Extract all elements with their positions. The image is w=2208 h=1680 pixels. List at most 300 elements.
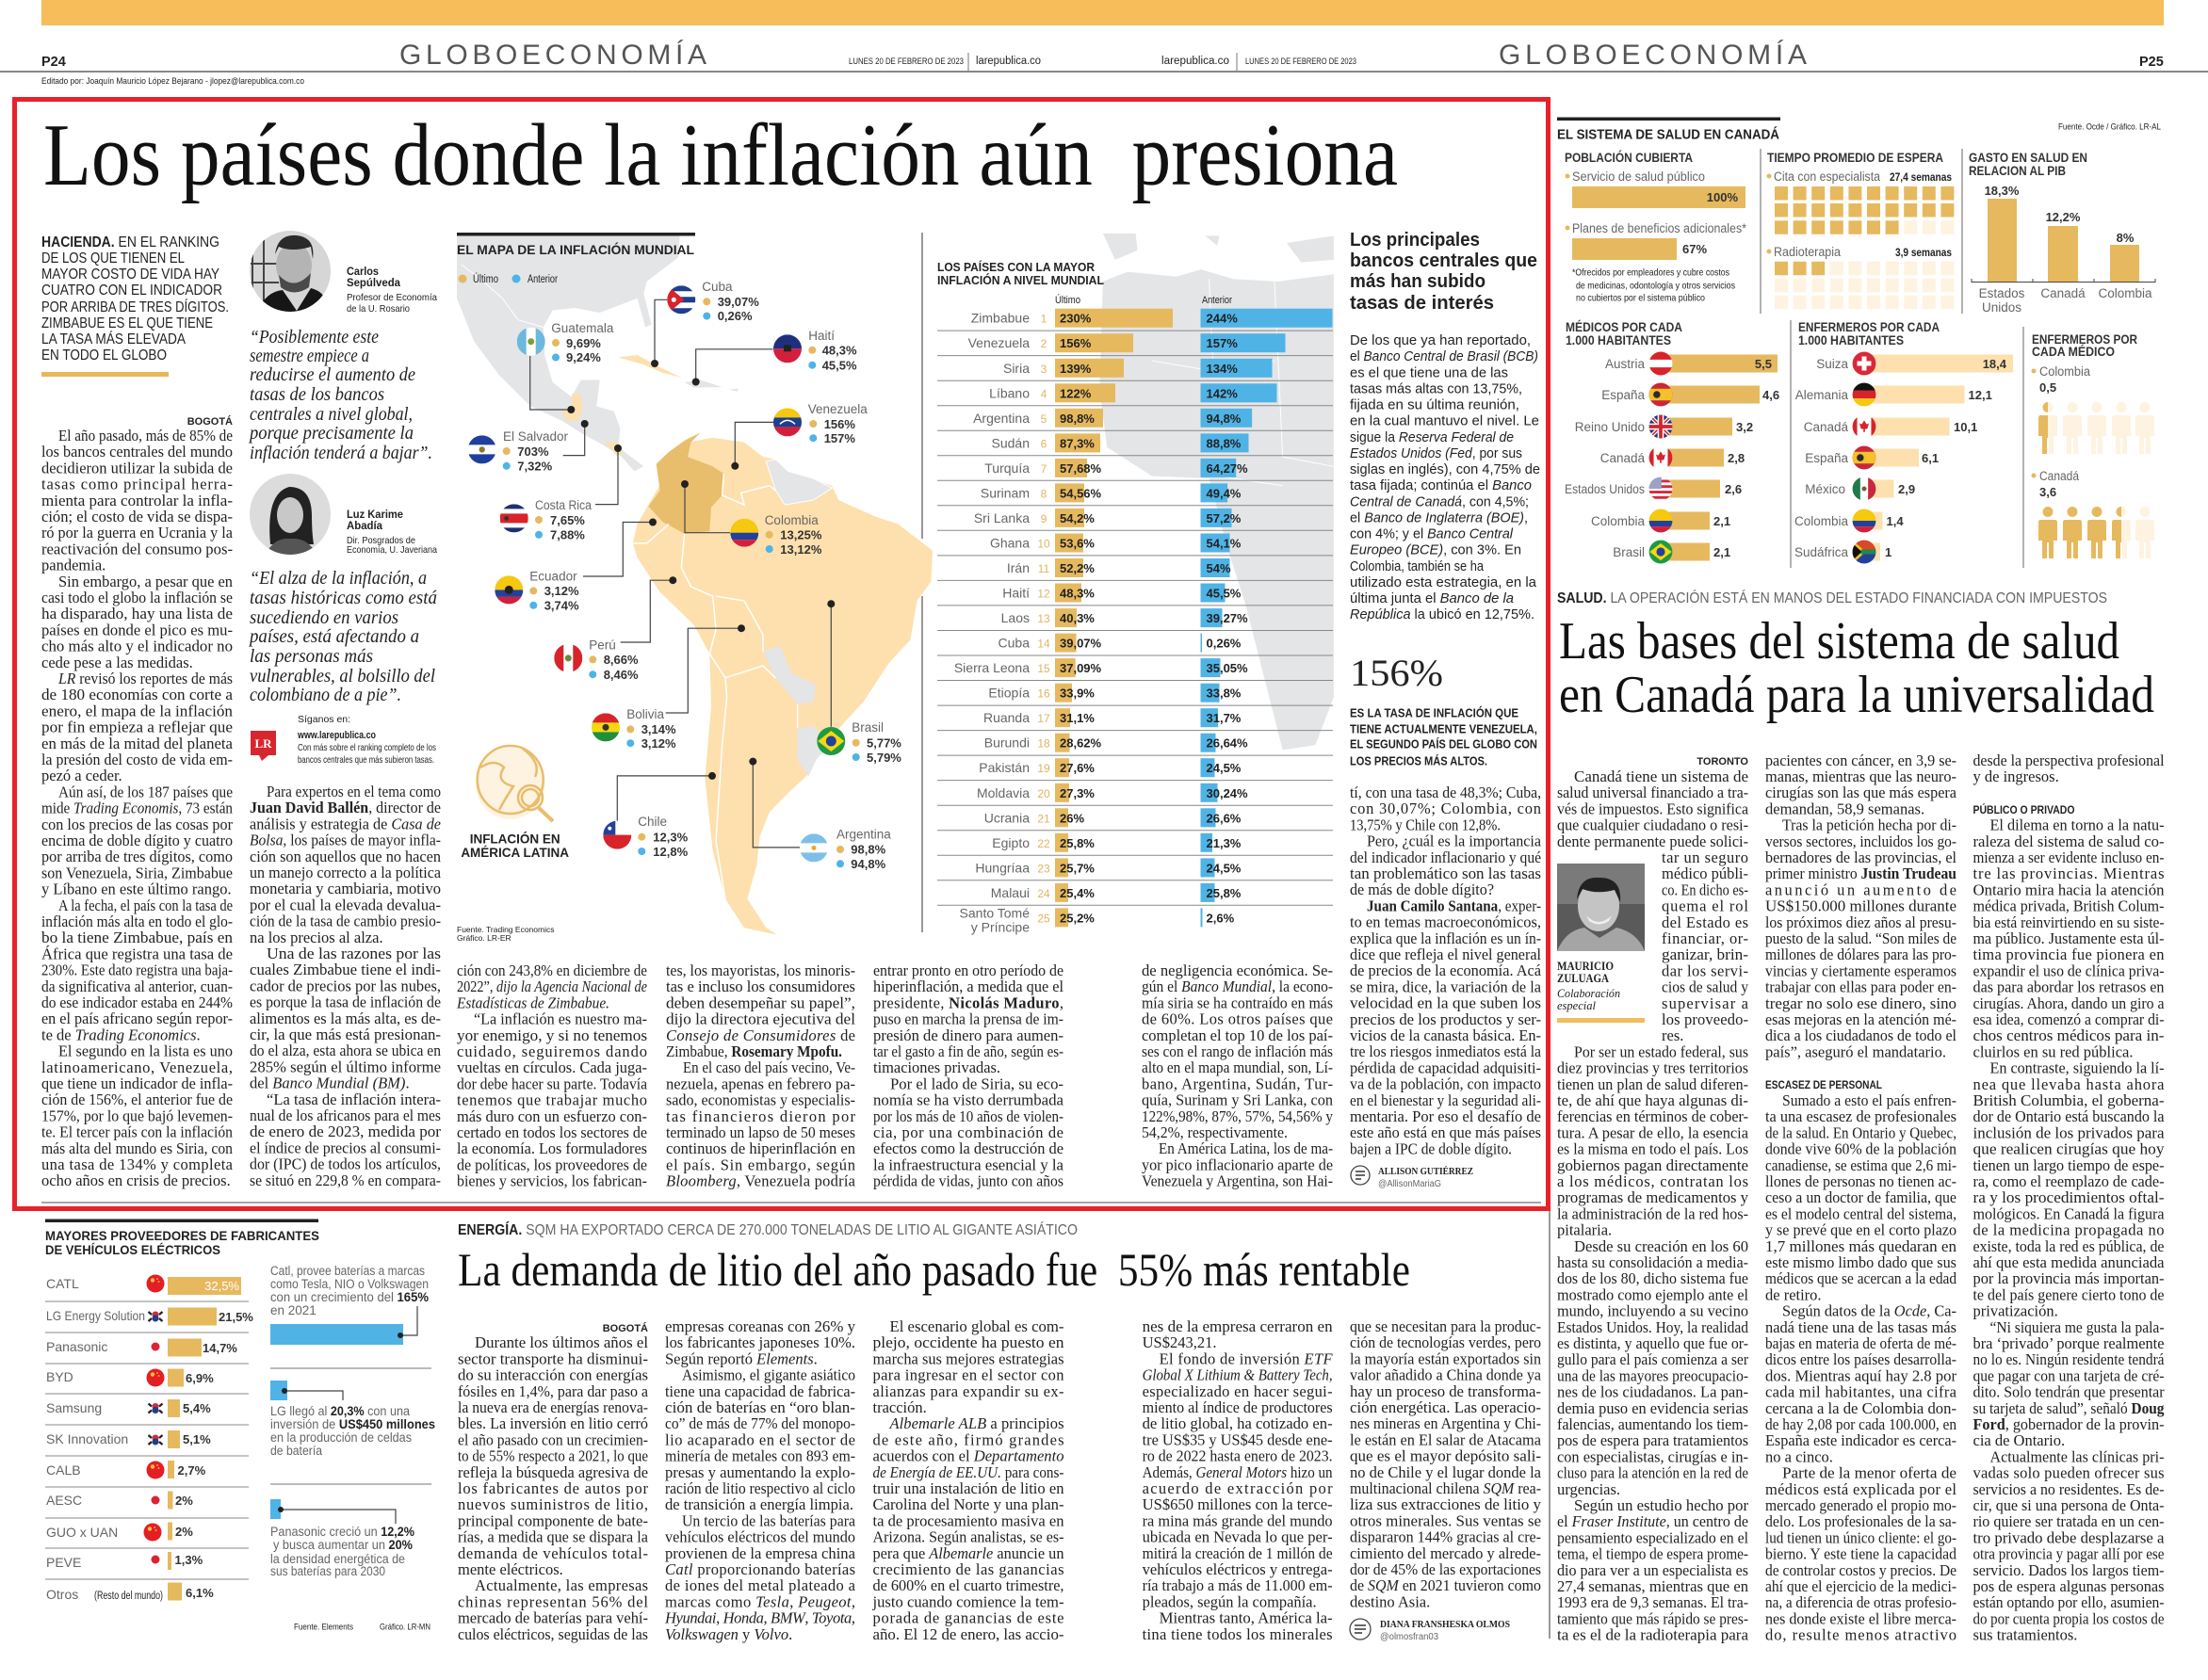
row: Sierra Leona: 37,09% [1060, 661, 1102, 675]
map callout: Guatemala [517, 321, 614, 413]
sidebar body: central banks: tasa fijada; continúa el Banco [1350, 478, 1532, 493]
article column 7 [1350, 783, 1542, 1157]
health article column 2: cercana a la de Colombia don- [1765, 1399, 1956, 1417]
pull quote 2: tasas históricas como está [250, 588, 437, 608]
health article column 1: dar los servi- [1662, 961, 1748, 979]
row: Ghana [937, 533, 1333, 556]
article column 2: alimentos es la más alta, es de- [250, 1010, 441, 1027]
lithium article column 3: truir una instalación de litio en [872, 1479, 1064, 1497]
map callout: Ecuador: 3,12% [544, 584, 579, 598]
health article column 2: donde vive 60% de la población [1765, 1140, 1956, 1158]
pull quote 1: centrales a nivel global, [250, 404, 413, 425]
sidebar body: central banks: tasas más altas con 13,75%, [1350, 381, 1522, 396]
article column 7: va de la población, con impacto [1350, 1075, 1541, 1093]
health story kicker: SALUD. LA OPERACIÓN ESTÁ EN MANOS DEL ESTADO FINANCIADA CON IMPUESTOS [1557, 590, 2107, 606]
health article column 3: expandir el uso de clínica priva- [1973, 961, 2165, 979]
health article column 3: no lo es. Ningún residente tendrá [1973, 1350, 2165, 1368]
article column 1: Aún así, de los 187 países que [58, 783, 233, 800]
chart: population covered: 67% [1682, 242, 1707, 256]
map callout: Cuba [651, 280, 759, 367]
health article column 1: médico públi- [1662, 864, 1748, 882]
row: Cuba [937, 634, 1333, 655]
map callout: Bolivia: 3,14% [641, 722, 676, 736]
byline: Allison Gutiérrez [1351, 1166, 1473, 1189]
article column 3: la economía. Los formuladores [457, 1139, 647, 1157]
row: Argentina: 5 [1041, 412, 1047, 426]
sidebar body: central banks: el Banco de Inglaterra (BOE), [1350, 510, 1528, 525]
byline: Allison Gutiérrez: @AllisonMariaG [1378, 1179, 1441, 1189]
health article column 3: médica privada, British Colum- [1973, 897, 2165, 915]
row: Laos: 39,27% [1206, 611, 1248, 625]
row: Líbano [937, 383, 1333, 406]
article column 1: da significativa al anterior, cuan- [41, 977, 233, 995]
health article column 2: manas, mientras que las neuro- [1765, 767, 1956, 785]
chart: nurses per 1,000 inhabitants: 10,1 [1954, 420, 1977, 434]
article column 6: quía, Surinam y Sri Lanka, con [1142, 1091, 1333, 1109]
table column headers [1055, 294, 1232, 306]
health article column 3: desde la perspectiva profesional [1973, 751, 2165, 769]
chart: nurses per doctor: 3,6 [2039, 485, 2056, 499]
health article column 3: bia está reinvirtiendo en su siste- [1973, 913, 2165, 931]
web promo: www.larepublica.co [297, 730, 376, 741]
article column 3: Estadísticas de Zimbabue. [456, 993, 609, 1011]
lithium article column 4: nes de la empresa cerraron en [1143, 1317, 1333, 1335]
health article column 1: una de las mayores preocupacio- [1557, 1366, 1748, 1384]
row: Zimbabue: 230% [1060, 312, 1092, 326]
row: Ucrania: 26,6% [1206, 811, 1242, 825]
article column 1: que tiene un indicador de infla- [41, 1074, 233, 1092]
chart: nurses per 1,000 inhabitants: Suiza [1816, 357, 1848, 371]
row: Panasonic [46, 1339, 237, 1356]
lithium article column 1: los fabricantes de autos por [458, 1479, 648, 1497]
chart: nurses per 1,000 inhabitants: Sudáfrica [1794, 545, 1848, 559]
row: Venezuela [937, 333, 1333, 356]
page header: left: larepublica.co [976, 56, 1041, 67]
article column 5: pérdida de vidas, junto con años [873, 1172, 1063, 1190]
chart: population covered: *Ofrecidos por empleadores y cubre costos [1572, 267, 1729, 279]
row: Santo Tomé y Príncipe: 2,6% [1206, 911, 1235, 925]
callout: Catl: en 2021 [270, 1303, 317, 1317]
article column 1: enero, el mapa de la inflación [41, 702, 233, 719]
lithium article column 5: ción de tecnologías verdes, pero [1350, 1333, 1541, 1351]
health article column 3: nea que llevaba hasta ahora [1973, 1075, 2165, 1093]
health article column 2: na, a diferencia de otras profesio- [1765, 1593, 1956, 1611]
lithium article column 2: Catl proporcionando baterías [665, 1560, 855, 1578]
sidebar body: central banks: utilizado esta estrategia, en la [1350, 575, 1537, 590]
chart: average wait time: 3,9 semanas [1895, 246, 1952, 259]
health article column 1: salud universal financiado a tra- [1557, 783, 1748, 801]
article column 7: bajen a IPC de doble dígito. [1350, 1139, 1512, 1157]
article column 1: pandemia. [41, 557, 106, 574]
chart: health spending as share of GDP: 18,3% [1985, 184, 2020, 198]
lithium article column 3: ta de procesamiento masiva en [872, 1511, 1064, 1529]
article column 7: to en temas macroeconómicos, [1350, 913, 1541, 931]
article column 3: certado en todos los sectores de [457, 1123, 647, 1141]
lithium article column 5: ción energética. Las operacio- [1350, 1398, 1541, 1416]
health article column 3: Ontario mira hacia la atención [1973, 880, 2164, 898]
article column 3: de políticas, los proveedores de [457, 1155, 647, 1173]
health article column 1: demia puso en evidencia serias [1557, 1399, 1748, 1417]
health article column 3: ma público. Justamente esta úl- [1973, 929, 2165, 947]
map callout: Venezuela [731, 402, 868, 470]
sidebar body: central banks: Colombia, también se ha [1350, 559, 1485, 574]
lithium article column 2: Volkswagen y Volvo. [665, 1625, 792, 1643]
row: Zimbabue: 244% [1206, 312, 1238, 326]
chart: nurses per 1,000 inhabitants: ENFERMEROS POR CADA [1798, 320, 1940, 334]
health article column 2: país”, aseguró el mandatario. [1765, 1042, 1946, 1060]
chart: health spending as share of GDP: Colombia [2098, 286, 2152, 300]
lithium article column 2: ción de baterías en “oro blan- [665, 1398, 855, 1416]
health article column 2: delo. Los profesionales de la sa- [1765, 1512, 1956, 1530]
big number caption: EL SEGUNDO PAÍS DEL GLOBO CON [1350, 736, 1537, 751]
pull quote 2 [248, 568, 437, 705]
row: Etiopía [937, 684, 1333, 705]
lithium article column 5 [1350, 1317, 1542, 1610]
health article column 3: servicios a no residentes. Es de- [1973, 1480, 2165, 1498]
lithium article column 2: de iones del metal plateado a [665, 1576, 856, 1594]
article column 5: Por el lado de Siria, su eco- [890, 1074, 1063, 1092]
lithium article column 3: plejo, occidente ha puesto en [872, 1333, 1063, 1351]
row: AESC: AESC [46, 1493, 82, 1508]
map callout: Chile: 12,3% [653, 831, 689, 844]
lithium article column 1: chinas representan 56% del [458, 1592, 648, 1610]
chart: nurses per doctor [2031, 332, 2154, 558]
health article column 3: dor de Ontario está buscando la [1973, 1107, 2165, 1125]
article column 1: te. El tercer país con la inflación [41, 1123, 233, 1141]
chart: doctors per 1,000 inhabitants: 2,6 [1725, 482, 1742, 496]
row: Sierra Leona: Sierra Leona [954, 660, 1030, 675]
health article column 2: 1,7 millones más quedaran en [1765, 1237, 1956, 1255]
row: Irán [937, 558, 1333, 580]
health article column 1: del Estado es [1662, 913, 1748, 931]
row: Egipto: 25,8% [1060, 836, 1095, 850]
lithium article column 5: dor de 45% de las exportaciones [1350, 1560, 1541, 1578]
lithium article column 4: mitirá la creación de 1 millón de [1143, 1544, 1333, 1562]
panel source: Gráfico. LR-MN [380, 1622, 430, 1633]
callout: Panasonic: la densidad energética de [270, 1552, 405, 1566]
health article column 2: los próximos diez años al presu- [1765, 913, 1956, 931]
row: Cuba: 0,26% [1206, 637, 1242, 651]
article column 1: tasas como principal herra- [41, 476, 233, 493]
lithium article column 4: de litio global, ha cotizado en- [1143, 1414, 1333, 1432]
health article column 3: pos de espera algunas personas [1973, 1577, 2165, 1595]
article column 5: nomía se ha visto derrumbada [873, 1091, 1064, 1109]
expert: Luz Karime Abadía: Dir. Posgrados de [347, 535, 415, 546]
lithium article column 2: presas y aumentando la explo- [665, 1463, 855, 1481]
article column 1: inflación más alta en todo el glo- [41, 913, 233, 930]
lithium article column 2 [664, 1317, 856, 1643]
health article column 2 [1765, 751, 1957, 1644]
page header: right: GLOBOECONOMÍA [1499, 40, 1807, 71]
chart: health spending as share of GDP: RELACION AL PIB [1969, 164, 2066, 178]
article column 3: 2022”, dijo la Agencia Nacional de [457, 977, 647, 995]
map callout: Colombia: 13,25% [780, 527, 822, 542]
article column 2: cir, la que más está presionan- [250, 1026, 441, 1043]
map callout: Chile [603, 772, 716, 859]
article column 6: ses con el rango de inflación más [1142, 1042, 1333, 1060]
article column 7: del indicador inflacionario y qué [1350, 848, 1541, 866]
article column 7: 13,75% y Chile con 12,8%. [1350, 816, 1501, 833]
chart: health spending as share of GDP: Canadá [2040, 286, 2086, 300]
health article column 2: este mismo limbo dado que sus [1765, 1253, 1956, 1271]
row: Ghana: Ghana [990, 535, 1030, 550]
article column 1: ción; el costo de vida se dispa- [41, 508, 233, 525]
row: Samsung: Samsung [46, 1400, 102, 1415]
big number: 156%: 156% [1350, 652, 1443, 694]
sidebar heading: central banks: más han subido [1350, 271, 1486, 292]
article column 1: 230%. Este dato registra una baja- [41, 961, 233, 979]
health article column 3: PÚBLICO O PRIVADO [1973, 802, 2074, 816]
health article column 1: gobiernos pagan directamente [1557, 1156, 1748, 1174]
lithium article column 1: to de 55% respecto a 2021, lo que [458, 1447, 648, 1465]
lithium article column 1: nuevos suministros de litio, [458, 1495, 648, 1513]
health article column 3: privatización. [1973, 1302, 2058, 1320]
chart: nurses per 1,000 inhabitants: Colombia [1794, 514, 1848, 528]
row: Burundi [937, 734, 1333, 755]
row: Sierra Leona [937, 658, 1333, 680]
map callout: Venezuela: Venezuela [808, 402, 868, 416]
health article column 1: con especialistas, cirugías e in- [1557, 1447, 1748, 1465]
article column 4: dijo la directora ejecutiva del [666, 1010, 855, 1028]
web promo [297, 714, 436, 766]
health article column 2: versos sectores, incluidos los go- [1765, 832, 1956, 850]
article column 1: la presión del costo de vida em- [41, 751, 233, 768]
article column 1 [41, 427, 234, 1189]
lithium article column 3: tracción. [872, 1398, 927, 1416]
lithium article column 1: fósiles en 1,4%, para dar paso a [458, 1382, 649, 1400]
health article column 2: España este indicador es cerca- [1765, 1431, 1956, 1449]
article column 7: velocidad en la que suben los [1350, 994, 1541, 1012]
row: Panasonic: Panasonic [46, 1339, 107, 1354]
map callout: Perú: 8,66% [604, 653, 639, 667]
photo: Carlos Sepúlveda [250, 231, 332, 315]
lithium article column 3: justo cuando comience la tem- [871, 1592, 1063, 1610]
map source: Fuente. Trading Economics [457, 925, 554, 934]
article column 1: te de Trading Economics. [41, 1026, 201, 1043]
health article column 2: do, resulte menos atractivo [1765, 1626, 1956, 1644]
health article column 3: British Columbia, el goberna- [1973, 1091, 2165, 1109]
row: Hungría [937, 858, 1333, 880]
intro deck: ZIMBABUE ES EL QUE TIENE [41, 315, 213, 331]
row: CALB [46, 1461, 206, 1478]
chart: nurses per 1,000 inhabitants: Canadá [1804, 420, 1848, 434]
health article column 2: nes donde existe el libre merca- [1765, 1609, 1956, 1627]
lithium article column 1: el año pasado con un crecimien- [458, 1430, 648, 1448]
article column 7: se mira, dice, la variación de la [1350, 977, 1542, 995]
health article column 2: anunció un aumento de [1765, 880, 1956, 898]
lithium article column 5: la mayoría están exportados sin [1350, 1349, 1541, 1367]
health article column 3: “Ni siquiera me gusta la pala- [1989, 1318, 2165, 1336]
intro deck: POR ARRIBA DE TRES DÍGITOS. [41, 298, 229, 315]
article column 4: tes, los mayoristas, los minoris- [666, 961, 855, 979]
row: Moldavia: 30,24% [1206, 786, 1248, 800]
row: Etiopía: Etiopía [988, 686, 1030, 701]
health article column 1: Desde su creación en los 60 [1574, 1237, 1748, 1255]
map callout: Argentina: 98,8% [851, 842, 886, 857]
chart: doctors per 1,000 inhabitants [1565, 320, 1779, 563]
pull quote 1: porque precisamente la [248, 423, 414, 444]
health article column 1: pitalaria. [1557, 1221, 1612, 1239]
chart: doctors per 1,000 inhabitants: Colombia [1591, 514, 1645, 528]
lithium article column 5: nes mineras en Argentina y Chi- [1350, 1414, 1541, 1432]
lithium article column 5: destino Asia. [1350, 1592, 1430, 1610]
health article column 1: Estados Unidos. Hoy, la realidad [1557, 1318, 1749, 1336]
chart: nurses per 1,000 inhabitants: 18,4 [1983, 357, 2007, 371]
health article column 1: pos de espera para tratamientos [1557, 1431, 1748, 1449]
chart: nurses per doctor: Colombia [2039, 364, 2090, 379]
lithium article column 2: provienen de la empresa china [665, 1544, 856, 1562]
article column 3: ción con 243,8% en diciembre de [457, 961, 647, 979]
big number caption: ES LA TASA DE INFLACIÓN QUE [1350, 706, 1518, 719]
expert: Luz Karime Abadía: Luz Karime [347, 508, 403, 521]
row: Haití: 48,3% [1060, 586, 1095, 601]
lithium article column 4: tina tiene todos los minerales [1143, 1625, 1333, 1643]
lithium article column 1: principal componente de bate- [458, 1511, 648, 1529]
health article column 2: cada mil habitantes, una cifra [1765, 1383, 1957, 1401]
lithium article column 5: liza sus extracciones de litio y [1350, 1495, 1542, 1513]
row: CATL: CATL [46, 1276, 79, 1291]
table panel: countries with highest inflation [937, 234, 1334, 934]
health article column 3: Ford, gobernador de la provin- [1973, 1415, 2164, 1433]
article column 2: 285% según el último informe [250, 1058, 441, 1075]
chart: average wait time: Cita con especialista [1774, 170, 1880, 184]
row: Argentina: 98,8% [1060, 412, 1095, 426]
article column 1: encima de doble dígito y cuatro [41, 832, 233, 849]
health article column 1: gullo para el país comienza a ser [1557, 1350, 1748, 1368]
article column 1: reactivación del consumo pos- [41, 540, 233, 557]
health article column 2: mercado generado el propio mo- [1765, 1496, 1956, 1514]
row: Hungría: Hungríaa [975, 860, 1030, 875]
article column 5: entrar pronto en otro período de [873, 961, 1063, 979]
article column 2: nual de los africanos para el mes [250, 1107, 441, 1124]
row: Sri Lanka: 57,2% [1206, 511, 1242, 525]
lithium article column 2: marcas como Tesla, Peugeot, [665, 1592, 855, 1610]
chart: nurses per 1,000 inhabitants: México [1805, 482, 1845, 496]
article column 5: cia, por una combinación de [873, 1123, 1063, 1141]
chart: doctors per 1,000 inhabitants: Estados Unidos [1565, 482, 1645, 496]
row: Ucrania: 21 [1037, 812, 1050, 825]
article column 4: Zimbabue, Rosemary Mpofu. [666, 1042, 842, 1060]
article column 5: hiperinflación, a medida que el [873, 977, 1063, 995]
article column 2: Bolsa, los países de mayor infla- [250, 832, 441, 849]
health article column 1: los proveedo- [1662, 1010, 1748, 1028]
chart: average wait time: 27,4 semanas [1890, 170, 1952, 184]
article column 2: por el cual la elevada devalua- [250, 896, 441, 913]
row: Cuba: Cuba [998, 636, 1030, 651]
health article column 2: lud tienen un único cliente: el go- [1765, 1528, 1956, 1546]
sidebar heading: central banks: bancos centrales que [1350, 250, 1537, 271]
health article column 2: ta una escasez de profesionales [1765, 1107, 1956, 1125]
row: Malaui [937, 883, 1333, 905]
map panel caption [461, 832, 569, 860]
article column 2: cador de precios por las nubes, [250, 977, 441, 994]
article column 4 [666, 961, 856, 1190]
lithium article column 3: Arizona. Según analistas, se es- [872, 1528, 1064, 1546]
lithium article column 1: Durante los últimos años el [475, 1333, 648, 1351]
lithium article column 5: no de Chile y el lugar donde la [1350, 1463, 1542, 1481]
map callout: Bolivia [592, 624, 745, 751]
pull quote 1: reducirse el aumento de [250, 364, 415, 385]
row: Surinam: 8 [1041, 487, 1047, 500]
article column 1: ción de 156%, el anterior fue de [41, 1090, 233, 1108]
sidebar body: central banks: siglas en inglés), con 4,75% de [1350, 462, 1540, 477]
health article column 1: dente permanente puede solici- [1557, 832, 1748, 850]
row: SK Innovation [46, 1430, 211, 1448]
health article column 1: supervisar a [1662, 994, 1749, 1012]
health article column 1: es distinta, y aquello que fue or- [1557, 1334, 1748, 1352]
row: Burundi: 18 [1037, 737, 1050, 751]
map panel caption: INFLACIÓN EN [470, 832, 560, 846]
row: Ruanda: 17 [1037, 712, 1050, 725]
map callout: Colombia: Colombia [765, 513, 819, 527]
health article column 1: dos de los 80, dicho sistema fue [1557, 1269, 1748, 1287]
photo: Luz Karime Abadía [250, 474, 331, 557]
health article column 1: urgencias. [1557, 1480, 1620, 1498]
article column 1: casi todo el globo la inflación se [41, 589, 233, 606]
expert: Carlos Sepúlveda: Profesor de Economía [347, 292, 437, 303]
sidebar body: central banks [1350, 333, 1540, 622]
lithium article column 3: de este año, firmó grandes [872, 1430, 1064, 1448]
row: Moldavia [937, 783, 1333, 805]
row: Argentina: 94,8% [1206, 412, 1242, 426]
row: Etiopía: 16 [1037, 687, 1050, 701]
health article column 1: Según un estudio hecho por [1574, 1496, 1749, 1514]
author block: Mauricio Zuluaga: ZULUAGA [1557, 972, 1609, 985]
row: Haití: 12 [1037, 588, 1050, 601]
red highlight frame [15, 100, 1549, 1209]
map callout: Brasil: 5,77% [867, 736, 901, 750]
row: GUO x UAN: 2% [175, 1525, 193, 1539]
author block: Mauricio Zuluaga: MAURICIO [1557, 960, 1614, 973]
map callout: Cuba: Cuba [702, 280, 733, 294]
table column headers: Último [1055, 294, 1080, 306]
page header: right: LUNES 20 DE FEBRERO DE 2023 [1245, 57, 1356, 66]
row: Samsung: 5,4% [183, 1401, 211, 1415]
chart: health spending as share of GDP [1969, 151, 2155, 315]
sidebar body: central banks: con 4%; y el Banco Central [1350, 527, 1514, 542]
lithium article column 4 [1143, 1317, 1334, 1643]
map callout: El Salvador: El Salvador [503, 429, 569, 444]
row: Siria [937, 359, 1333, 380]
article column 7: de precios de la economía. Acá [1350, 961, 1542, 979]
row: Ucrania [937, 808, 1333, 831]
byline: Allison Gutiérrez: ALLISON GUTIÉRREZ [1378, 1166, 1473, 1177]
health article column 2: bierno. Y este tiene la capacidad [1765, 1545, 1957, 1563]
row: Malaui: 24 [1037, 887, 1050, 900]
row: Ghana: 54,1% [1206, 537, 1242, 550]
health article column 1: hasta su consolidación a media- [1557, 1253, 1748, 1271]
panel source: Fuente. Elements [294, 1622, 353, 1633]
row: Cuba: 14 [1037, 638, 1050, 651]
health article column 3: tienen un largo tiempo de espe- [1973, 1156, 2165, 1174]
callout: Catl: como Tesla, NIO o Volkswagen [270, 1277, 429, 1291]
map callout: Venezuela: 156% [824, 417, 855, 431]
article column 7: mentaria. Por eso el desafío de [1350, 1107, 1541, 1125]
health article column 1: mostrado como ejemplo ante el [1557, 1285, 1748, 1303]
callout: LG: inversión de US$450 millones [270, 1417, 435, 1431]
article column 1: cho más alto y el indicador no [41, 638, 233, 655]
chart: average wait time: TIEMPO PROMEDIO DE ESPERA [1767, 151, 1943, 165]
pull quote 1 [248, 327, 432, 463]
pull quote 1: “Posiblemente este [250, 327, 379, 347]
health article column 2: vincias y ciertamente esperamos [1765, 961, 1956, 979]
health article column 3: El dilema en torno a la natu- [1989, 816, 2165, 834]
page header: left: GLOBOECONOMÍA [399, 40, 706, 71]
callout: LG: de batería [270, 1444, 322, 1458]
chart: health spending as share of GDP: GASTO EN SALUD EN [1969, 151, 2087, 165]
chart: doctors per 1,000 inhabitants: 2,1 [1713, 514, 1730, 528]
row: Líbano: Líbano [989, 385, 1030, 400]
